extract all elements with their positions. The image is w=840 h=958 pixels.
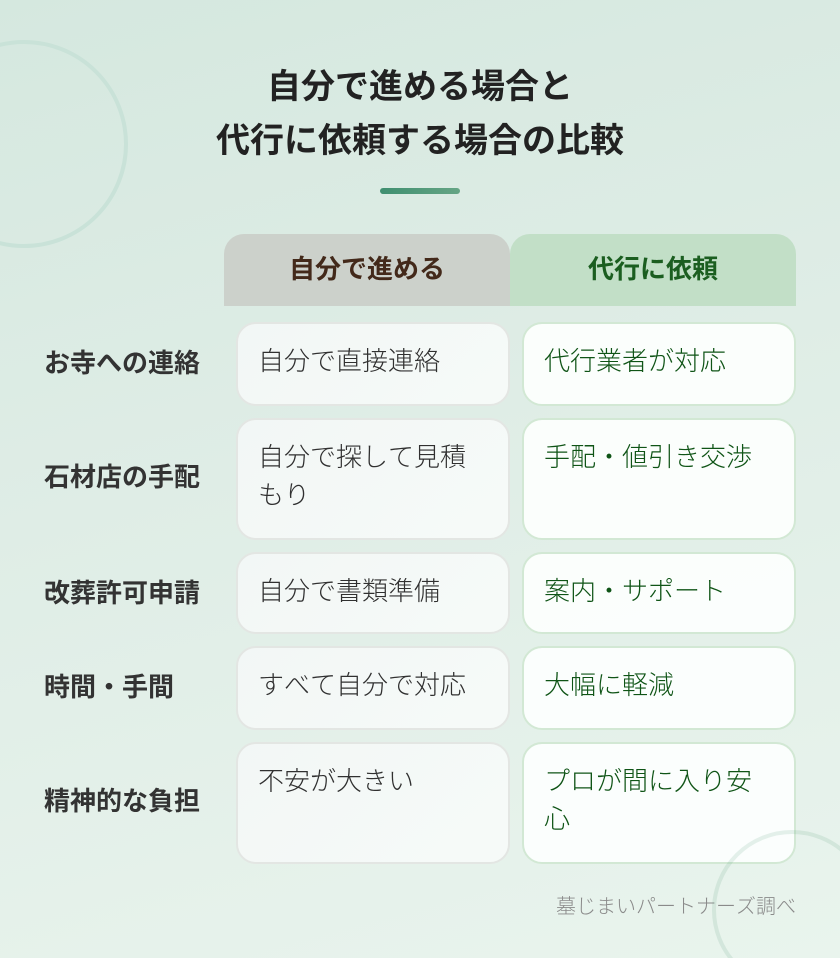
cell: self, permit: 自分で書類準備 xyxy=(258,576,440,606)
column header: agency xyxy=(510,234,796,306)
cell: agency, temple contact xyxy=(522,322,796,406)
cell: agency, time: 大幅に軽減 xyxy=(544,670,674,700)
cell: self, time xyxy=(236,646,510,730)
row label: permit: 改葬許可申請 xyxy=(44,578,200,608)
decorative circle: top left xyxy=(0,40,128,248)
cell: self, mental burden xyxy=(236,742,510,864)
cell: agency, permit: 案内・サポート xyxy=(544,576,726,606)
cell: self, stonemason: 自分で探して見積もり xyxy=(258,442,466,510)
row label: time: 時間・手間 xyxy=(44,672,174,702)
column header: self xyxy=(224,234,510,306)
cell: self, stonemason xyxy=(236,418,510,540)
cell: agency, mental burden xyxy=(522,742,796,864)
cell: agency, time xyxy=(522,646,796,730)
column header: self: 自分で進める xyxy=(289,254,445,284)
cell: agency, permit xyxy=(522,552,796,634)
cell: agency, mental burden: プロが間に入り安心 xyxy=(544,766,752,834)
source note: 墓じまいパートナーズ調べ xyxy=(556,896,796,918)
cell: self, temple contact xyxy=(236,322,510,406)
title: 自分で進める場合と xyxy=(267,68,573,106)
row label: stonemason: 石材店の手配 xyxy=(44,462,200,492)
cell: agency, stonemason: 手配・値引き交渉 xyxy=(544,442,752,472)
cell: self, temple contact: 自分で直接連絡 xyxy=(258,346,440,376)
row label: mental burden: 精神的な負担 xyxy=(44,786,200,816)
cell: self, mental burden: 不安が大きい xyxy=(258,766,414,796)
title underline xyxy=(380,188,460,194)
cell: self, permit xyxy=(236,552,510,634)
title: 代行に依頼する場合の比較 xyxy=(216,122,624,160)
row label: temple contact: お寺への連絡 xyxy=(44,348,200,378)
decorative circle: bottom right xyxy=(712,830,840,958)
cell: agency, temple contact: 代行業者が対応 xyxy=(544,346,726,376)
cell: agency, stonemason xyxy=(522,418,796,540)
column header: agency: 代行に依頼 xyxy=(588,254,718,284)
title xyxy=(216,68,624,160)
cell: self, time: すべて自分で対応 xyxy=(258,670,466,700)
